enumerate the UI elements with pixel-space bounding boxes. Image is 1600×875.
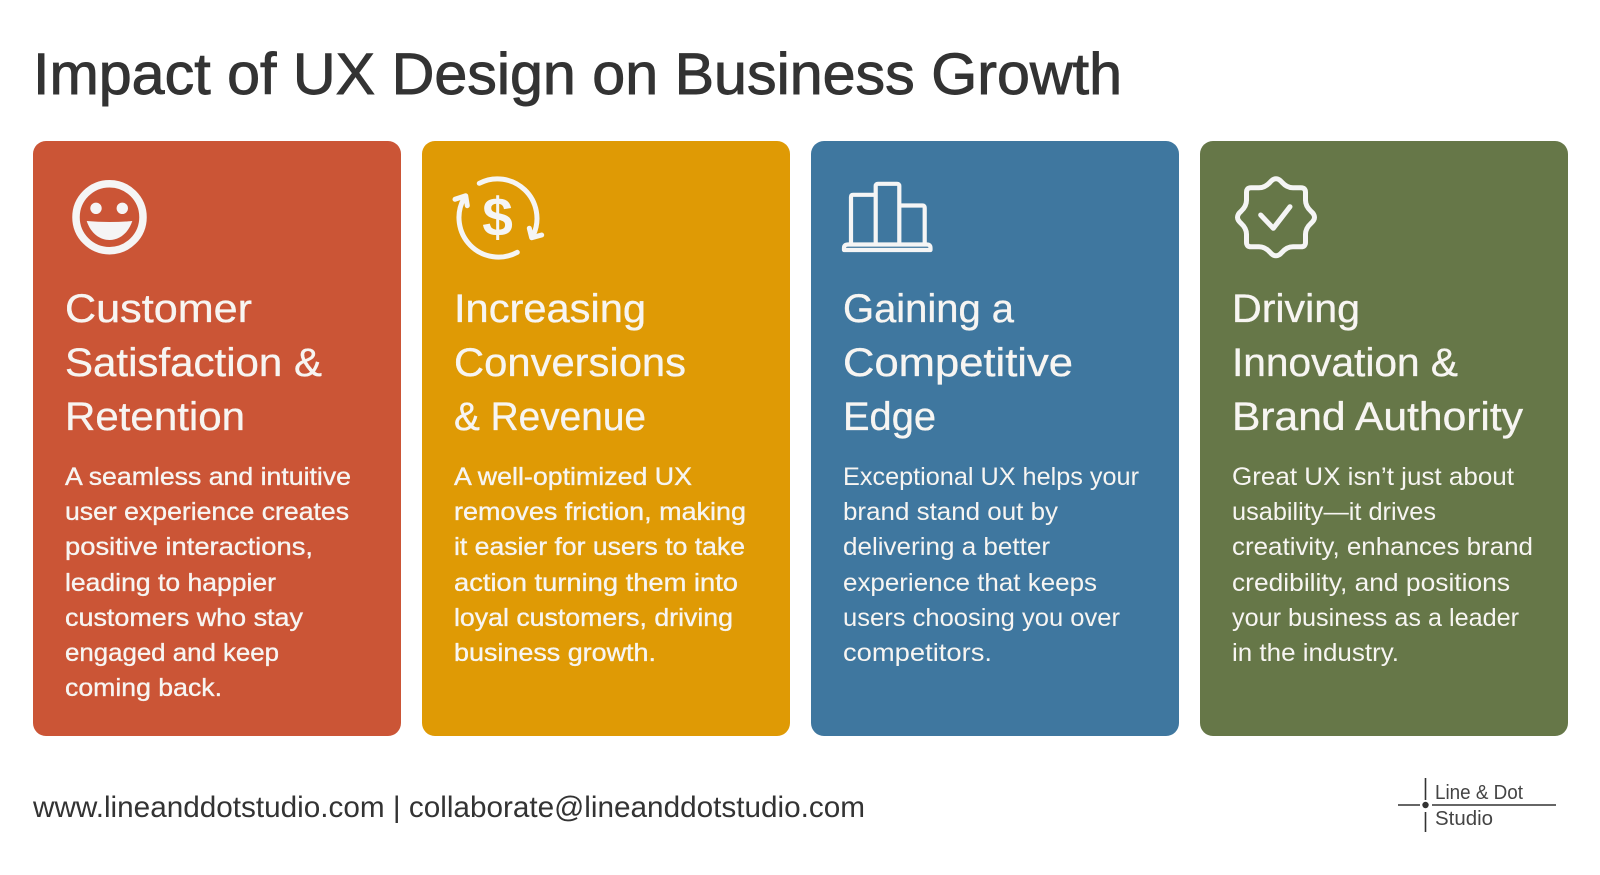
heading: competitive edge — [843, 287, 1073, 439]
body text: customer satisfaction: A seamless and intuitive — [65, 463, 351, 491]
heading: competitive edge: Gaining a — [843, 287, 1015, 331]
heading: increasing conversions — [454, 287, 686, 439]
body text: increasing conversions: it easier for users to take — [454, 533, 745, 561]
heading: customer satisfaction — [65, 287, 322, 439]
card background amber — [422, 141, 790, 736]
heading: customer satisfaction: Customer — [65, 287, 252, 331]
body text: competitive edge — [843, 463, 1139, 667]
body text: customer satisfaction: engaged and keep — [65, 639, 279, 667]
heading: competitive edge: Competitive — [843, 341, 1073, 385]
body text: increasing conversions: loyal customers, driving — [454, 604, 733, 632]
body text: customer satisfaction: customers who stay — [65, 604, 304, 632]
body text: customer satisfaction: leading to happier — [65, 569, 276, 597]
body text: increasing conversions: removes friction, making — [454, 498, 746, 526]
body text: driving innovation: your business as a leader — [1232, 604, 1519, 632]
heading: driving innovation — [1232, 287, 1523, 439]
body text: driving innovation: in the industry. — [1232, 639, 1399, 667]
body text: driving innovation: Great UX isn’t just about — [1232, 463, 1514, 491]
heading: customer satisfaction: Retention — [65, 395, 245, 439]
body text: driving innovation — [1232, 463, 1533, 667]
body text: increasing conversions: action turning them into — [454, 569, 738, 597]
icon: bar chart — [844, 184, 930, 250]
panel: driving innovation — [1200, 141, 1568, 736]
body text: increasing conversions: business growth. — [454, 639, 656, 667]
logo: Line & Dot Studio: Studio — [1435, 808, 1493, 830]
body text: competitive edge: experience that keeps — [843, 569, 1097, 597]
body text: driving innovation: credibility, and positions — [1232, 569, 1510, 597]
body text: competitive edge: Exceptional UX helps your — [843, 463, 1139, 491]
icon: dollar with circular arrows: $ — [482, 186, 513, 248]
body text: customer satisfaction: coming back. — [65, 674, 222, 702]
body text: driving innovation: creativity, enhances brand — [1232, 533, 1533, 561]
logo: Line & Dot Studio: Line & Dot — [1435, 782, 1523, 804]
body text: competitive edge: brand stand out by — [843, 498, 1059, 526]
body text: competitive edge: competitors. — [843, 639, 992, 667]
heading: driving innovation: Brand Authority — [1232, 395, 1523, 439]
heading: competitive edge: Edge — [843, 395, 936, 439]
icon: dollar with circular arrows — [455, 179, 542, 257]
card background red — [33, 141, 401, 736]
body text: customer satisfaction — [65, 463, 351, 702]
body text: customer satisfaction: user experience creates — [65, 498, 349, 526]
body text: competitive edge: delivering a better — [843, 533, 1050, 561]
body text: increasing conversions: A well-optimized UX — [454, 463, 692, 491]
icon: verified badge — [1238, 179, 1314, 256]
body text: competitive edge: users choosing you over — [843, 604, 1120, 632]
card background green — [1200, 141, 1568, 736]
card background blue — [811, 141, 1179, 736]
panel: competitive edge — [811, 141, 1179, 736]
logo: Line & Dot Studio — [1398, 778, 1556, 832]
title: Impact of UX Design on Business Growth — [33, 42, 1122, 107]
heading: increasing conversions: Increasing — [454, 287, 646, 331]
heading: increasing conversions: & Revenue — [454, 395, 646, 439]
heading: customer satisfaction: Satisfaction & — [65, 341, 322, 385]
panel: customer satisfaction — [33, 141, 401, 736]
footer contact line: www.lineanddotstudio.com | collaborate@lineanddotstudio.com — [32, 791, 865, 824]
panel: increasing conversions — [422, 141, 790, 736]
body text: driving innovation: usability—it drives — [1232, 498, 1436, 526]
icon: smiley face — [76, 184, 143, 251]
heading: driving innovation: Driving — [1232, 287, 1360, 331]
heading: increasing conversions: Conversions — [454, 341, 686, 385]
body text: increasing conversions — [454, 463, 746, 667]
heading: driving innovation: Innovation & — [1232, 341, 1458, 385]
body text: customer satisfaction: positive interactions, — [65, 533, 313, 561]
